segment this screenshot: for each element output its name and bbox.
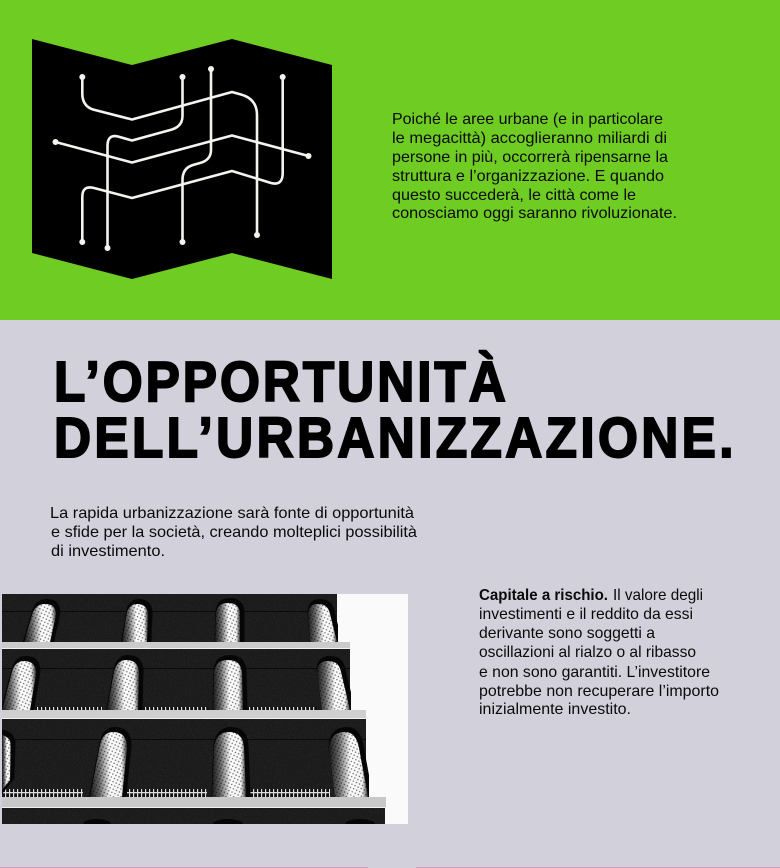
text block: risk warning: investimenti e il reddito da essi (479, 606, 693, 623)
text block: intro on green: Poiché le aree urbane (e in particolare (392, 111, 663, 128)
heading (54, 350, 734, 465)
text block: risk warning: derivante sono soggetti a (479, 625, 655, 642)
text block: intro on green (392, 111, 677, 222)
heading: L’OPPORTUNITÀ (54, 351, 506, 414)
text block: risk warning (479, 587, 719, 718)
text block: intro on green: le megacittà) accoglieranno miliardi di (392, 130, 667, 147)
text block: intro on green: struttura e l’organizzazione. E quando (392, 168, 664, 185)
text block: risk warning: inizialmente investito. (479, 701, 631, 718)
text block: urbanisation lead (50, 505, 417, 560)
text block: urbanisation lead: e sfide per la società, creando molteplici possibilità (51, 524, 417, 541)
panel: green header (0, 0, 780, 320)
text block: urbanisation lead: La rapida urbanizzazione sarà fonte di opportunità (50, 505, 414, 522)
text block: urbanisation lead: di investimento. (51, 543, 165, 560)
text block: risk warning: e non sono garantiti. L’investitore (479, 664, 710, 681)
text block: risk warning: oscillazioni al rialzo o al ribasso (479, 644, 696, 661)
text block: risk warning: Capitale a rischio. (479, 587, 608, 604)
panel: grey body (0, 320, 780, 868)
photo: building facade (2, 594, 408, 824)
icon: folded metro map (32, 39, 332, 279)
text block: intro on green: questo succederà, le città come le (392, 187, 636, 204)
text block: risk warning: potrebbe non recuperare l’importo (479, 683, 719, 700)
text block: intro on green: conosciamo oggi saranno rivoluzionate. (392, 205, 677, 222)
text block: risk warning: Il valore degli (613, 587, 703, 604)
text block: intro on green: persone in più, occorrerà ripensarne la (392, 149, 668, 166)
